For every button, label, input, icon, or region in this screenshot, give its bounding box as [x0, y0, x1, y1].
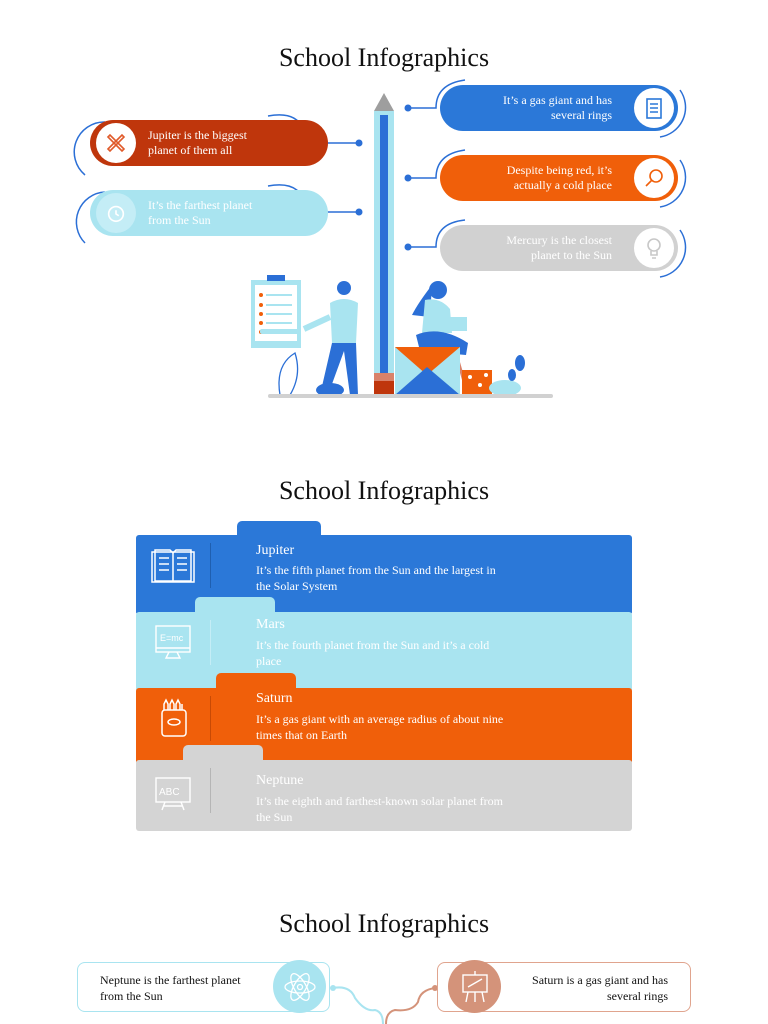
envelope: [395, 347, 460, 395]
row: Mars: It’s the fourth planet from the Sun and it’s a cold: [256, 638, 489, 652]
icon: crayon box: [161, 698, 187, 737]
row: Jupiter: It’s the fifth planet from the Sun and the largest in: [256, 563, 496, 577]
pill: farthest: from the Sun: [148, 213, 211, 227]
plants: [316, 355, 525, 397]
callout: Neptune: [77, 962, 330, 1012]
pill: Jupiter: planet of them all: [148, 143, 232, 157]
row: Saturn: times that on Earth: [256, 728, 347, 742]
icon: atom: [273, 960, 326, 1013]
pill: mercury: planet to the Sun: [531, 248, 612, 262]
icon: clock: [96, 193, 136, 233]
woman: [412, 281, 468, 385]
pill: Jupiter: Jupiter is the biggest: [148, 128, 247, 142]
pill: red cold: actually a cold place: [514, 178, 612, 192]
row: Saturn: Saturn: [256, 691, 293, 706]
title 1: School Infographics: [279, 43, 489, 72]
pill: farthest: It’s the farthest planet: [148, 198, 252, 212]
icon: E=mc monitor: [155, 625, 191, 659]
pencil: [374, 93, 394, 395]
row: Mars: [136, 612, 632, 692]
icon: E=mc monitor: E=mc: [160, 633, 184, 643]
pill: mercury: [440, 225, 678, 271]
man: [304, 281, 358, 395]
callout: Neptune: Neptune is the farthest planet: [100, 973, 241, 987]
pill: gas giant: several rings: [551, 108, 612, 122]
pill: farthest: [90, 190, 328, 236]
pill: gas giant: [440, 85, 678, 131]
row: Jupiter: Jupiter: [256, 543, 294, 558]
icon: pencil ruler: [96, 123, 136, 163]
pill: gas giant: It’s a gas giant and has: [503, 93, 612, 107]
title 2: School Infographics: [279, 476, 489, 505]
pill: Jupiter: [90, 120, 328, 166]
clipboard: [251, 275, 301, 348]
dice: [462, 370, 492, 395]
row: Saturn: [136, 688, 632, 764]
row: Mars: place: [256, 654, 281, 668]
callout: Saturn: [437, 962, 691, 1012]
row: Neptune: Neptune: [256, 773, 303, 788]
illustration: pencil and students: [251, 93, 553, 398]
icon: easel: [448, 960, 501, 1013]
row: Neptune: [136, 760, 632, 831]
icon: magnifier: [634, 158, 674, 198]
row: Jupiter: [136, 535, 632, 615]
callout: Neptune: from the Sun: [100, 989, 163, 1003]
row: Saturn: It’s a gas giant with an average radius of about nine: [256, 712, 503, 726]
pill: mercury: Mercury is the closest: [506, 233, 612, 247]
icon: book: [151, 549, 195, 583]
pill: red cold: Despite being red, it’s: [507, 163, 612, 177]
callout: Saturn: several rings: [607, 989, 668, 1003]
icon: ABC board: ABC: [159, 787, 180, 798]
row: Neptune: It’s the eighth and farthest-known solar planet from: [256, 794, 503, 808]
icon: clipboard: [634, 88, 674, 128]
connectors section 1: [73, 79, 686, 278]
row: Mars: Mars: [256, 617, 285, 632]
ground: [268, 394, 553, 398]
icon: bulb: [634, 228, 674, 268]
callout: Saturn: Saturn is a gas giant and has: [532, 973, 668, 987]
connector lines section 3: [330, 985, 437, 1024]
icon: ABC board: [155, 777, 191, 810]
row: Jupiter: the Solar System: [256, 579, 337, 593]
title 3: School Infographics: [279, 909, 489, 938]
pill: red cold: [440, 155, 678, 201]
row: Neptune: the Sun: [256, 810, 292, 824]
